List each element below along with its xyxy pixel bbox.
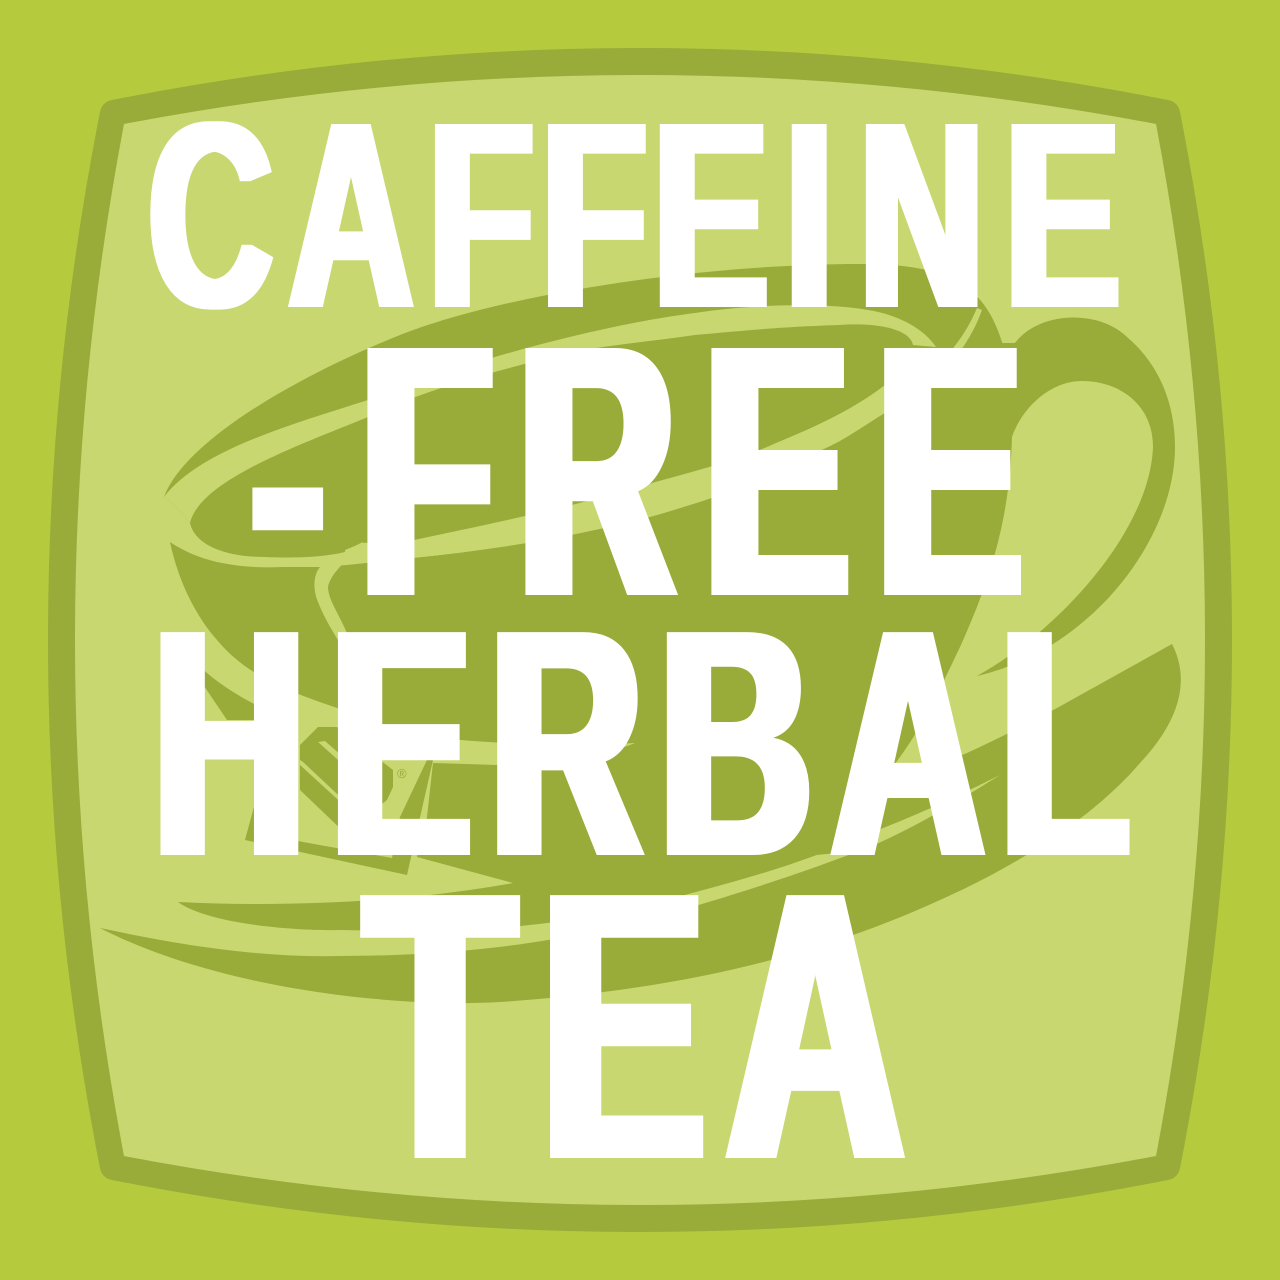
cup rim and tea surface [164, 264, 1003, 560]
rim highlight band [164, 305, 936, 523]
heading: herbal: HERBAL [153, 562, 1129, 924]
tea bag string [314, 542, 363, 660]
heading: caffeine: CAFFEINE [148, 66, 1120, 364]
saucer [100, 644, 1181, 1003]
cup bowl [170, 310, 1012, 883]
icon: tea cup and saucer [100, 264, 1181, 1003]
tea lower highlight band [345, 308, 982, 565]
left shadow under cup [200, 667, 262, 720]
cup handle [977, 317, 1175, 676]
heading: tea: TEA [365, 813, 904, 1239]
registered mark: ® [397, 766, 407, 781]
heading: -free: -FREE [252, 270, 1021, 678]
tea bag tag [245, 727, 433, 875]
